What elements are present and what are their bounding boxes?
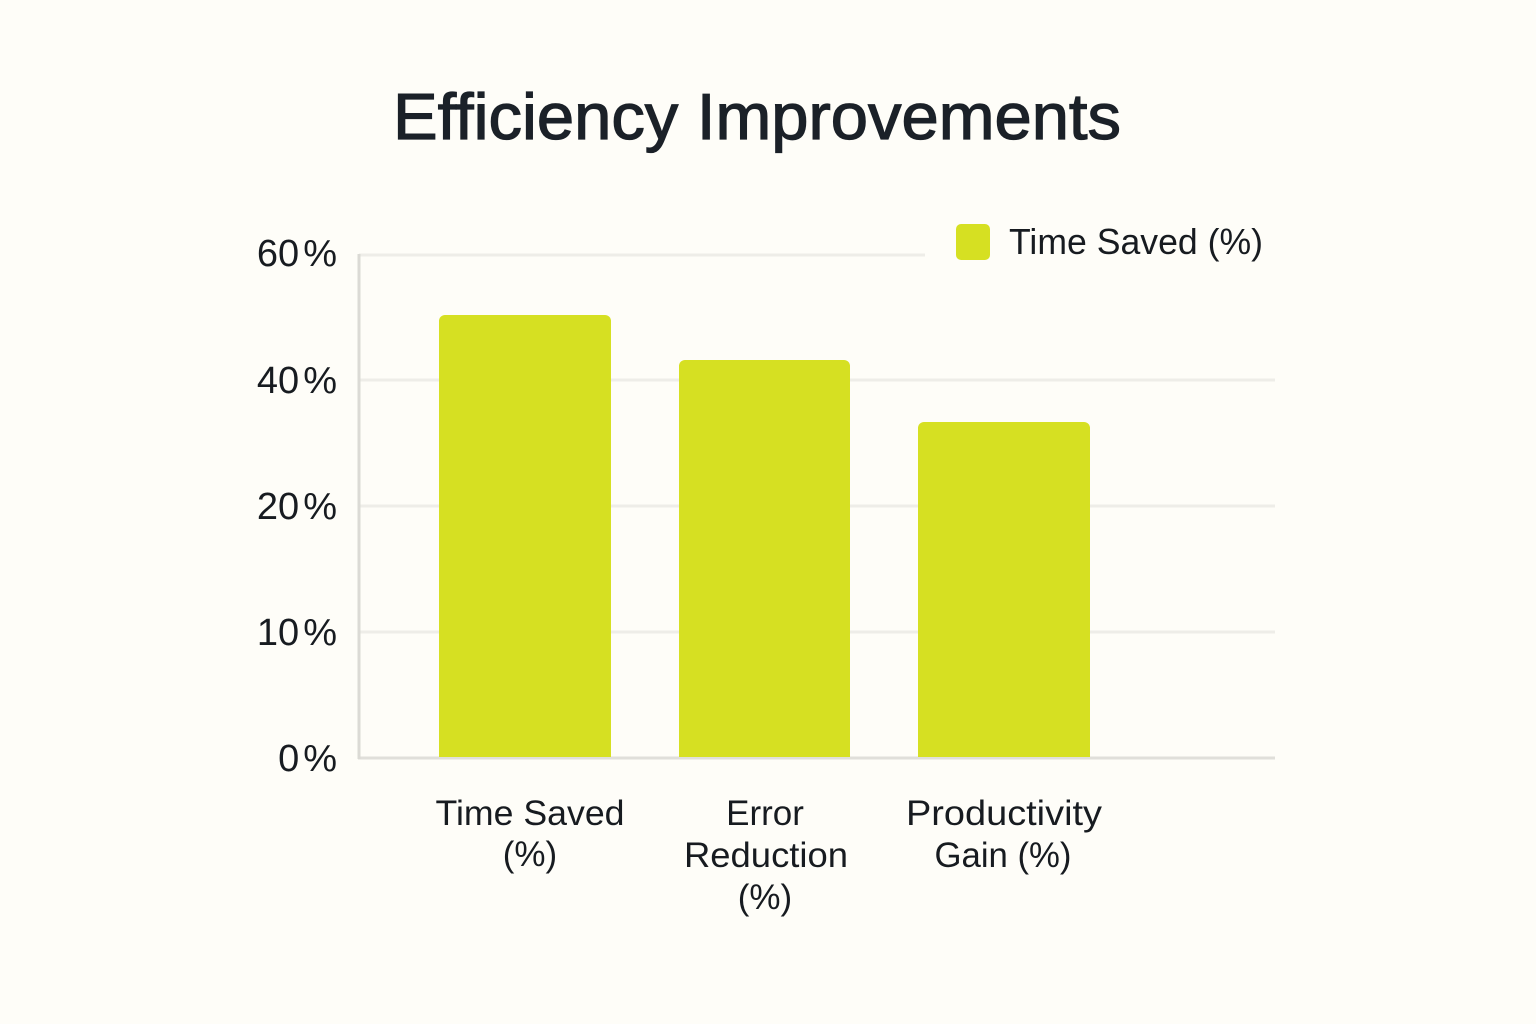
y axis labels: 20%: [257, 486, 337, 528]
bar: time saved: [439, 315, 611, 757]
bar: error reduction: [679, 360, 850, 757]
title: Efficiency Improvements: [393, 80, 1121, 153]
bar chart: [257, 233, 1275, 917]
legend: [956, 221, 1263, 262]
y axis labels: 0%: [278, 738, 337, 780]
x axis labels: Productivity: [906, 794, 1103, 833]
x axis labels: Reduction: [684, 836, 848, 875]
y axis labels: 10%: [257, 612, 337, 654]
x axis labels: (%): [738, 878, 792, 917]
x axis labels: Error: [726, 794, 804, 833]
x axis labels: Gain (%): [934, 836, 1072, 875]
legend label: Time Saved (%): [1009, 221, 1263, 262]
gridlines: [358, 254, 1275, 759]
y axis labels: 60%: [257, 233, 337, 275]
x axis labels: Time Saved: [436, 794, 624, 833]
y axis labels: 40%: [257, 360, 337, 402]
x axis labels: (%): [503, 835, 557, 874]
y axis labels: [257, 233, 337, 780]
bar: productivity gain: [918, 422, 1090, 757]
legend swatch: [956, 224, 990, 260]
x axis labels: [436, 794, 1103, 917]
